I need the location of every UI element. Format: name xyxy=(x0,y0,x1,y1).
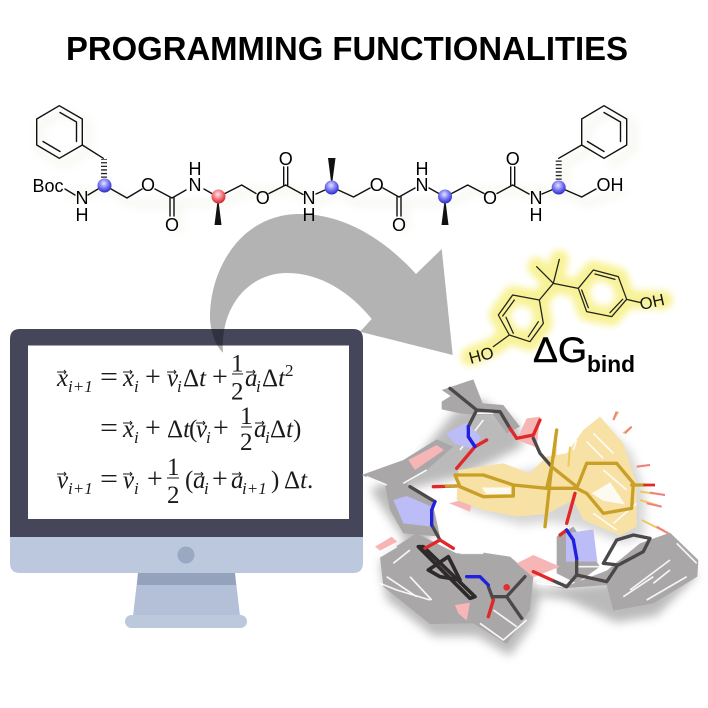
equation line 1: i xyxy=(177,377,182,396)
bonds xyxy=(493,259,641,347)
equation line 3: + xyxy=(147,464,163,495)
equation line 2 xyxy=(100,403,301,456)
equation line 2: 1 xyxy=(240,403,252,430)
equation line 1: + xyxy=(212,362,228,393)
equation line 1: i xyxy=(256,377,261,396)
equation line 1: + xyxy=(145,362,161,393)
delta G bind label: ΔG xyxy=(533,331,587,370)
ensemble shadow xyxy=(370,399,697,656)
equation line 3: 1 xyxy=(167,454,180,481)
equation line 1: i xyxy=(134,377,139,396)
equation line 3: = xyxy=(100,464,118,495)
atom labels: H xyxy=(530,205,542,225)
equation line 2: + xyxy=(145,413,161,444)
atom labels: N xyxy=(530,188,542,208)
3D conformer ensemble xyxy=(362,379,698,656)
atom labels: H xyxy=(302,205,316,225)
equation line 3: a xyxy=(193,467,206,494)
monitor power button xyxy=(178,546,194,564)
atom labels: H xyxy=(188,159,202,179)
equation line 3: i xyxy=(204,479,209,498)
delta G bind label xyxy=(533,331,635,377)
guest molecule with yellow highlight xyxy=(467,259,666,368)
atom labels: O xyxy=(279,149,293,169)
right phenyl ring xyxy=(559,106,627,158)
equation line 1: i+1 xyxy=(68,377,93,396)
delta G bind label: bind xyxy=(587,351,635,377)
atom labels: N xyxy=(188,175,202,195)
monitor screen xyxy=(28,346,349,519)
atom labels: O xyxy=(165,215,179,235)
backbone bonds xyxy=(65,185,596,198)
equation line 1 xyxy=(56,350,294,406)
atom labels: N xyxy=(416,175,428,195)
equation line 2: ( xyxy=(189,416,197,443)
yellow shadow xyxy=(465,425,645,544)
equation line 2: + xyxy=(213,413,229,444)
equation line 3: ) xyxy=(271,467,279,494)
stereocentre spheres xyxy=(98,178,566,204)
left phenyl ring xyxy=(37,106,103,158)
atom labels: O xyxy=(141,175,155,195)
equation line 2: x xyxy=(122,416,134,443)
blue atoms xyxy=(432,427,577,585)
yellow ghost gaps xyxy=(483,433,637,530)
equation line 1: x xyxy=(122,365,134,392)
atom labels xyxy=(32,149,624,235)
red ghost conformers xyxy=(375,417,560,621)
dark ring front xyxy=(418,547,475,598)
equation line 1: 2 xyxy=(231,378,244,406)
yellow glow xyxy=(470,259,663,357)
atom labels: H xyxy=(76,205,88,225)
atom labels: OH xyxy=(596,175,624,195)
chemical structure: oligocarbamate chain xyxy=(32,106,633,235)
monitor stand xyxy=(125,573,247,628)
equation line 2: ) xyxy=(293,416,301,443)
atom labels: N xyxy=(302,188,316,208)
atom labels: O xyxy=(392,215,406,235)
atom labels: N xyxy=(76,188,88,208)
equation line 2: i xyxy=(265,428,270,447)
equation line 2: a xyxy=(254,416,266,443)
yellow ghost conformers xyxy=(457,417,637,536)
equation line 3: + xyxy=(212,464,228,495)
equation line 2: v xyxy=(196,416,208,443)
equations xyxy=(56,350,313,509)
equation line 2: i xyxy=(206,428,211,447)
equation line 3: Δt. xyxy=(284,467,313,494)
equation line 2: 2 xyxy=(240,429,252,456)
equation line 3: ( xyxy=(185,467,193,494)
monitor body xyxy=(10,537,363,573)
equation line 1: x xyxy=(56,365,68,392)
equation line 3: v xyxy=(123,467,135,494)
atom labels: H xyxy=(416,159,428,179)
equation line 3: v xyxy=(57,467,69,494)
guest molecule with yellow highlight: OH xyxy=(638,290,666,314)
equation line 1: a xyxy=(245,365,258,392)
yellow sticks xyxy=(445,430,643,527)
equation line 1: 2 xyxy=(285,361,294,380)
atom labels: O xyxy=(370,175,384,195)
equation line 3: i+1 xyxy=(242,479,267,498)
equation line 1: Δt xyxy=(262,365,286,392)
hydroxyl labels: HO xyxy=(467,343,496,368)
red atoms xyxy=(425,420,575,617)
equation line 2: Δt xyxy=(167,416,191,443)
equation line 1: v xyxy=(167,365,179,392)
equation line 2: = xyxy=(100,413,118,444)
equation line 3: a xyxy=(231,467,244,494)
equation line 3 xyxy=(57,454,313,509)
atom labels: O xyxy=(256,188,270,208)
equation line 2: Δt xyxy=(270,416,294,443)
equation line 1: = xyxy=(100,362,118,393)
stereo wedges xyxy=(214,158,448,225)
atom labels: O xyxy=(483,188,497,208)
equation line 3: 2 xyxy=(167,482,180,509)
red ghost tips xyxy=(613,412,668,533)
dark grey sticks xyxy=(410,388,650,618)
chain shadow xyxy=(40,112,633,232)
blue ghost conformers xyxy=(393,423,597,562)
red hydroxyl tip xyxy=(433,485,655,487)
equation line 1: Δt xyxy=(183,365,207,392)
title: PROGRAMMING FUNCTIONALITIES xyxy=(66,30,628,67)
equation line 3: i+1 xyxy=(68,479,93,498)
ghost highlights xyxy=(367,413,697,640)
equation line 2: i xyxy=(134,428,139,447)
monitor xyxy=(10,329,363,628)
equation line 3: i xyxy=(134,479,139,498)
grey ghost conformers xyxy=(362,379,698,644)
equation line 1: 1 xyxy=(231,350,244,378)
atom labels: O xyxy=(506,149,520,169)
curved arrow xyxy=(210,214,453,355)
atom labels: Boc xyxy=(32,176,64,196)
